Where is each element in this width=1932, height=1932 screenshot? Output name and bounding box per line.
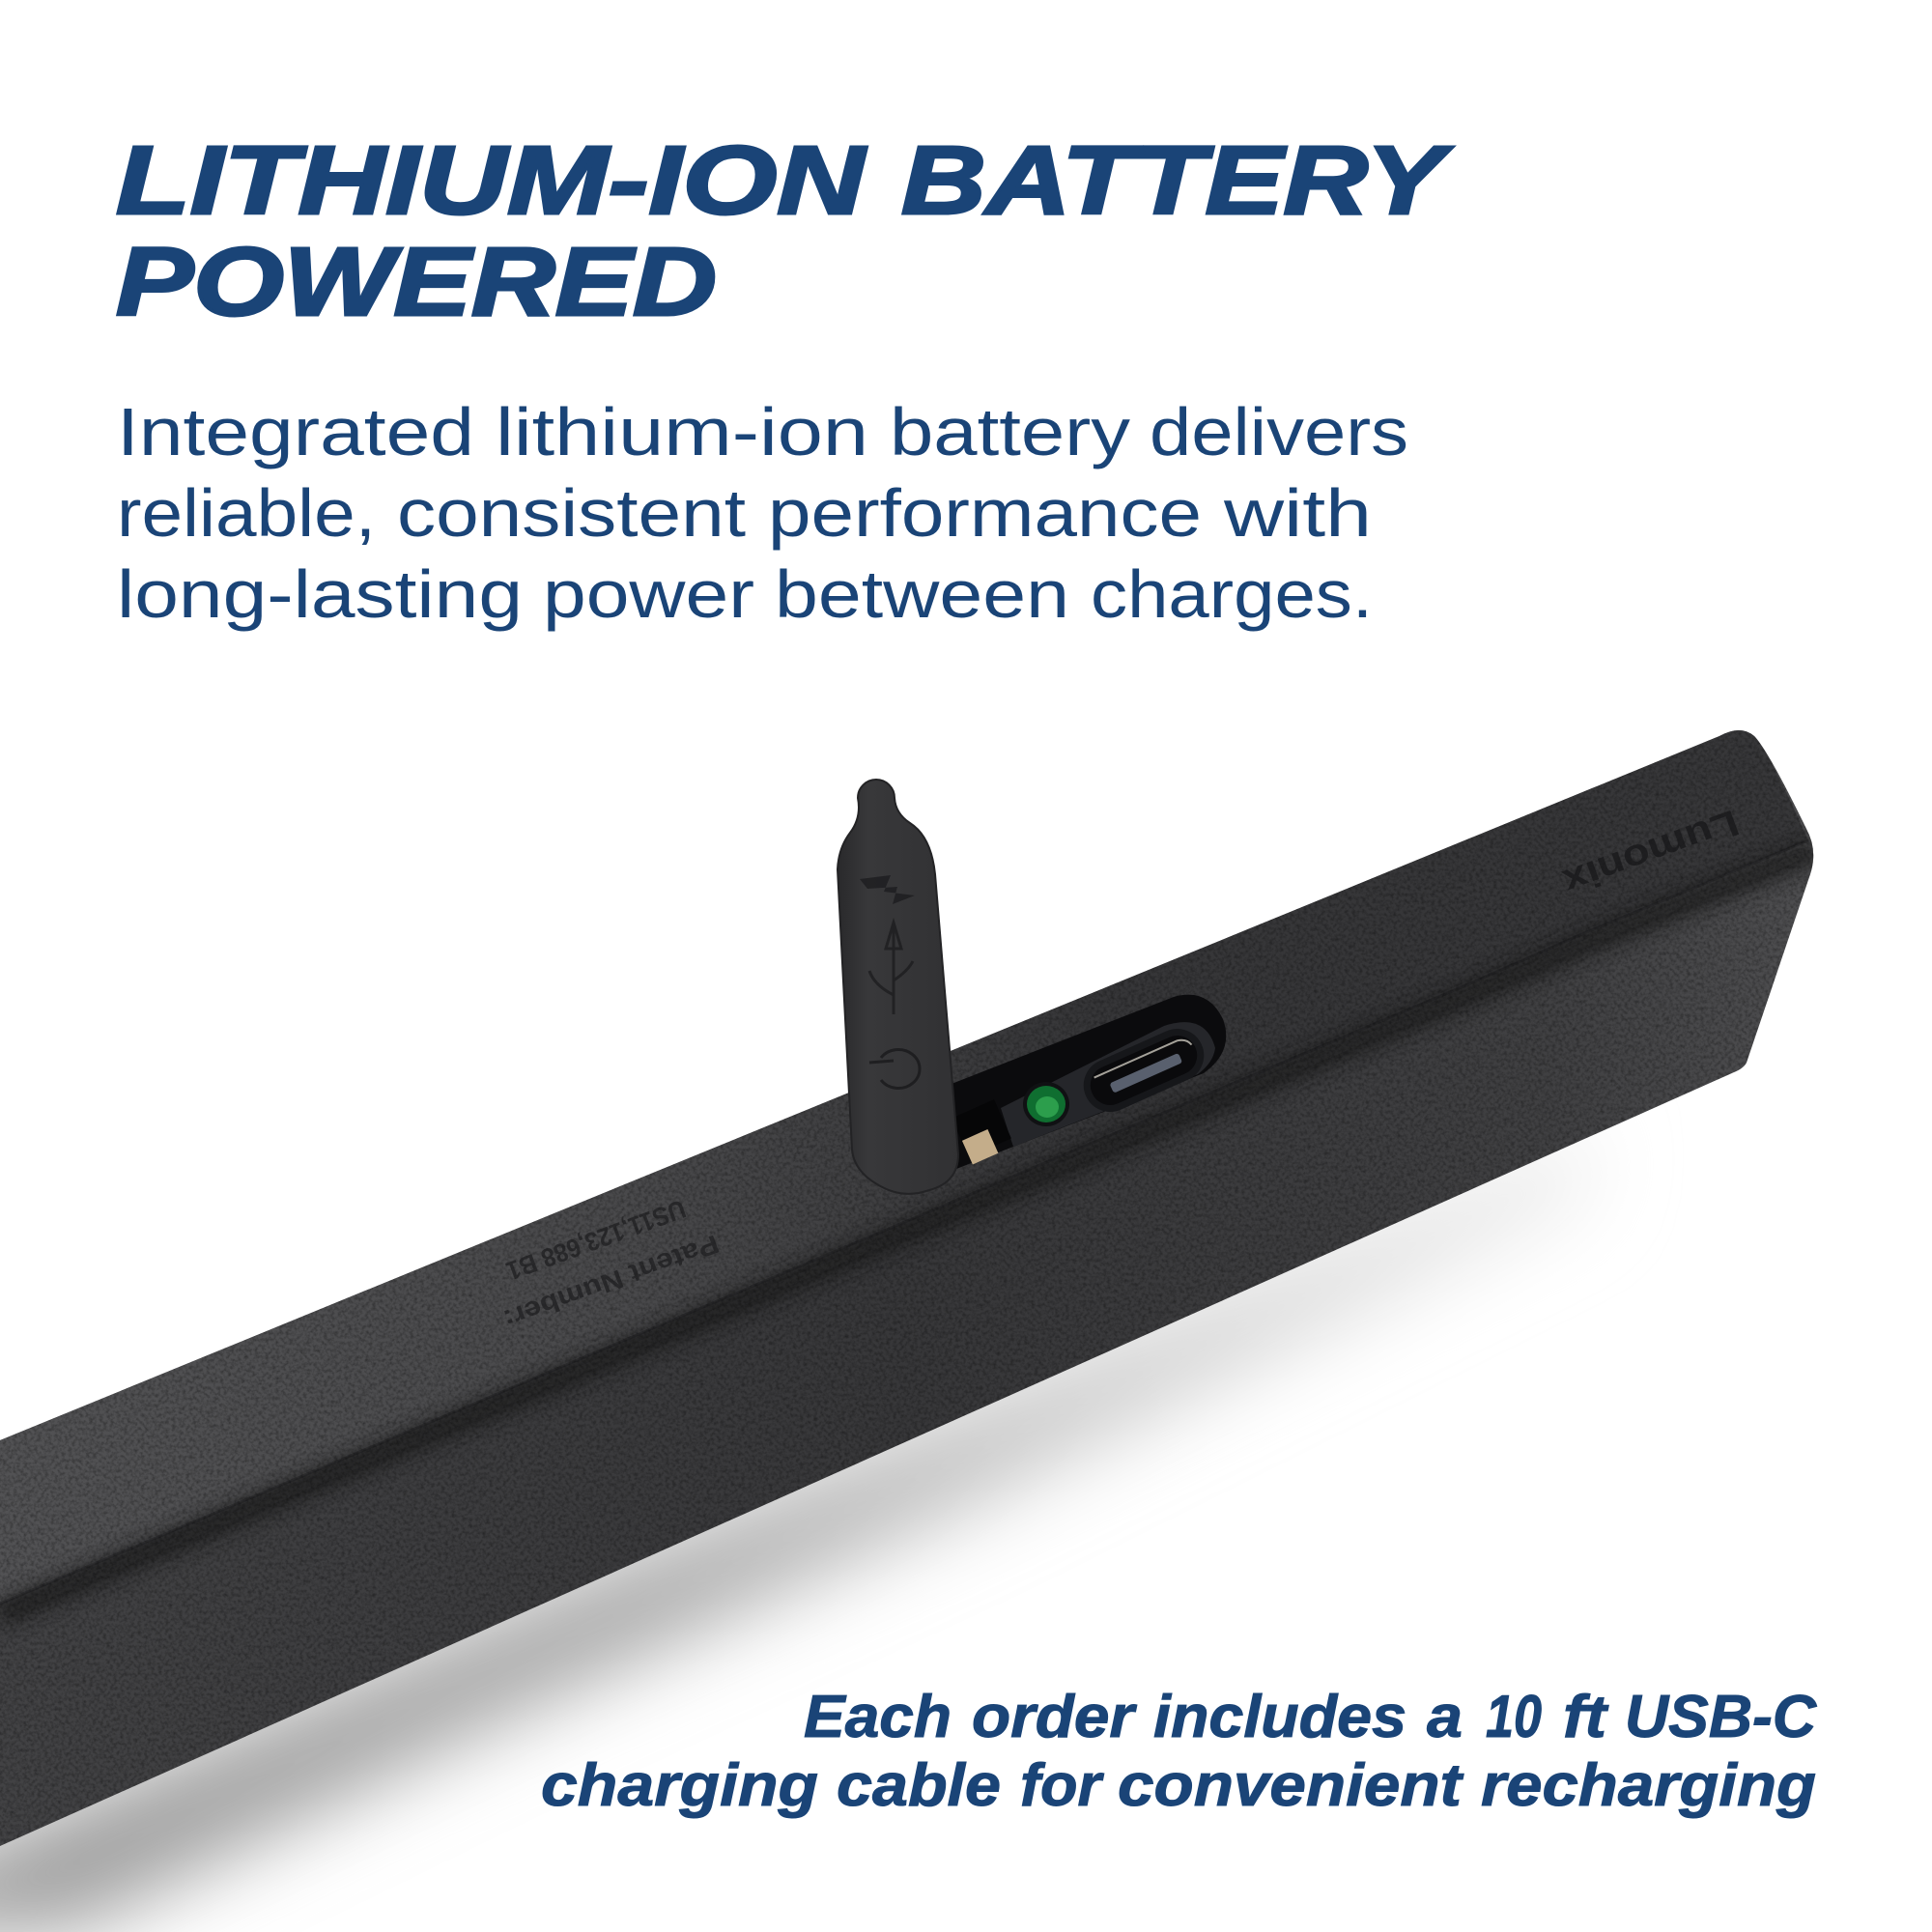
description text: performance <box>768 475 1202 551</box>
embossed patent number: US11,123,688 B1 <box>502 1194 690 1286</box>
USB-C port <box>1080 1025 1208 1116</box>
green status LED <box>1023 1082 1069 1126</box>
description text: Integrated <box>117 394 474 469</box>
description text: lithium-ion <box>496 394 868 469</box>
description text <box>117 394 1408 632</box>
embossed patent number <box>484 1187 723 1334</box>
description text: charges. <box>1091 556 1373 632</box>
cable callout: USB-C <box>1625 1684 1817 1750</box>
cable callout: for <box>1020 1752 1104 1819</box>
rubber port cap <box>838 780 958 1194</box>
description text: between <box>775 556 1069 632</box>
cable callout <box>541 1684 1817 1819</box>
cable callout: ft <box>1563 1684 1609 1750</box>
description text: power <box>543 556 754 632</box>
USB icon on cap <box>869 923 913 1014</box>
cable callout: charging <box>541 1752 818 1819</box>
surface texture <box>0 715 1835 1874</box>
title <box>116 127 1454 336</box>
cable callout: includes <box>1153 1684 1406 1750</box>
cable callout: a <box>1427 1684 1463 1750</box>
side face of battery <box>0 730 1813 1846</box>
title: LITHIUM-ION <box>116 127 867 235</box>
cable callout: order <box>972 1684 1137 1750</box>
lightning icon on cap <box>860 875 915 904</box>
title: POWERED <box>116 228 717 336</box>
cable callout: convenient <box>1118 1752 1464 1819</box>
description text: battery <box>890 394 1130 469</box>
description text: with <box>1223 475 1372 551</box>
cable callout: 10 <box>1486 1684 1542 1750</box>
description text: delivers <box>1150 394 1408 469</box>
top face of battery <box>0 730 1808 1604</box>
product: rechargeable battery body <box>0 715 1835 1874</box>
product cast shadow <box>0 1125 1594 1932</box>
description text: reliable, <box>117 475 376 551</box>
description text: consistent <box>397 475 746 551</box>
description text: long-lasting <box>117 556 523 632</box>
cable callout: Each <box>804 1684 952 1750</box>
charging port recess <box>952 995 1226 1169</box>
title: BATTERY <box>901 127 1454 235</box>
crease between faces <box>0 840 1816 1615</box>
embossed logo: Lumonix <box>1557 802 1744 902</box>
cable callout: recharging <box>1481 1752 1816 1819</box>
cable callout: cable <box>837 1752 1001 1819</box>
contact pad <box>952 1099 1011 1164</box>
power icon on cap <box>869 1049 920 1088</box>
embossed patent number: Patent Number: <box>499 1229 723 1334</box>
port plate <box>1001 1022 1215 1147</box>
